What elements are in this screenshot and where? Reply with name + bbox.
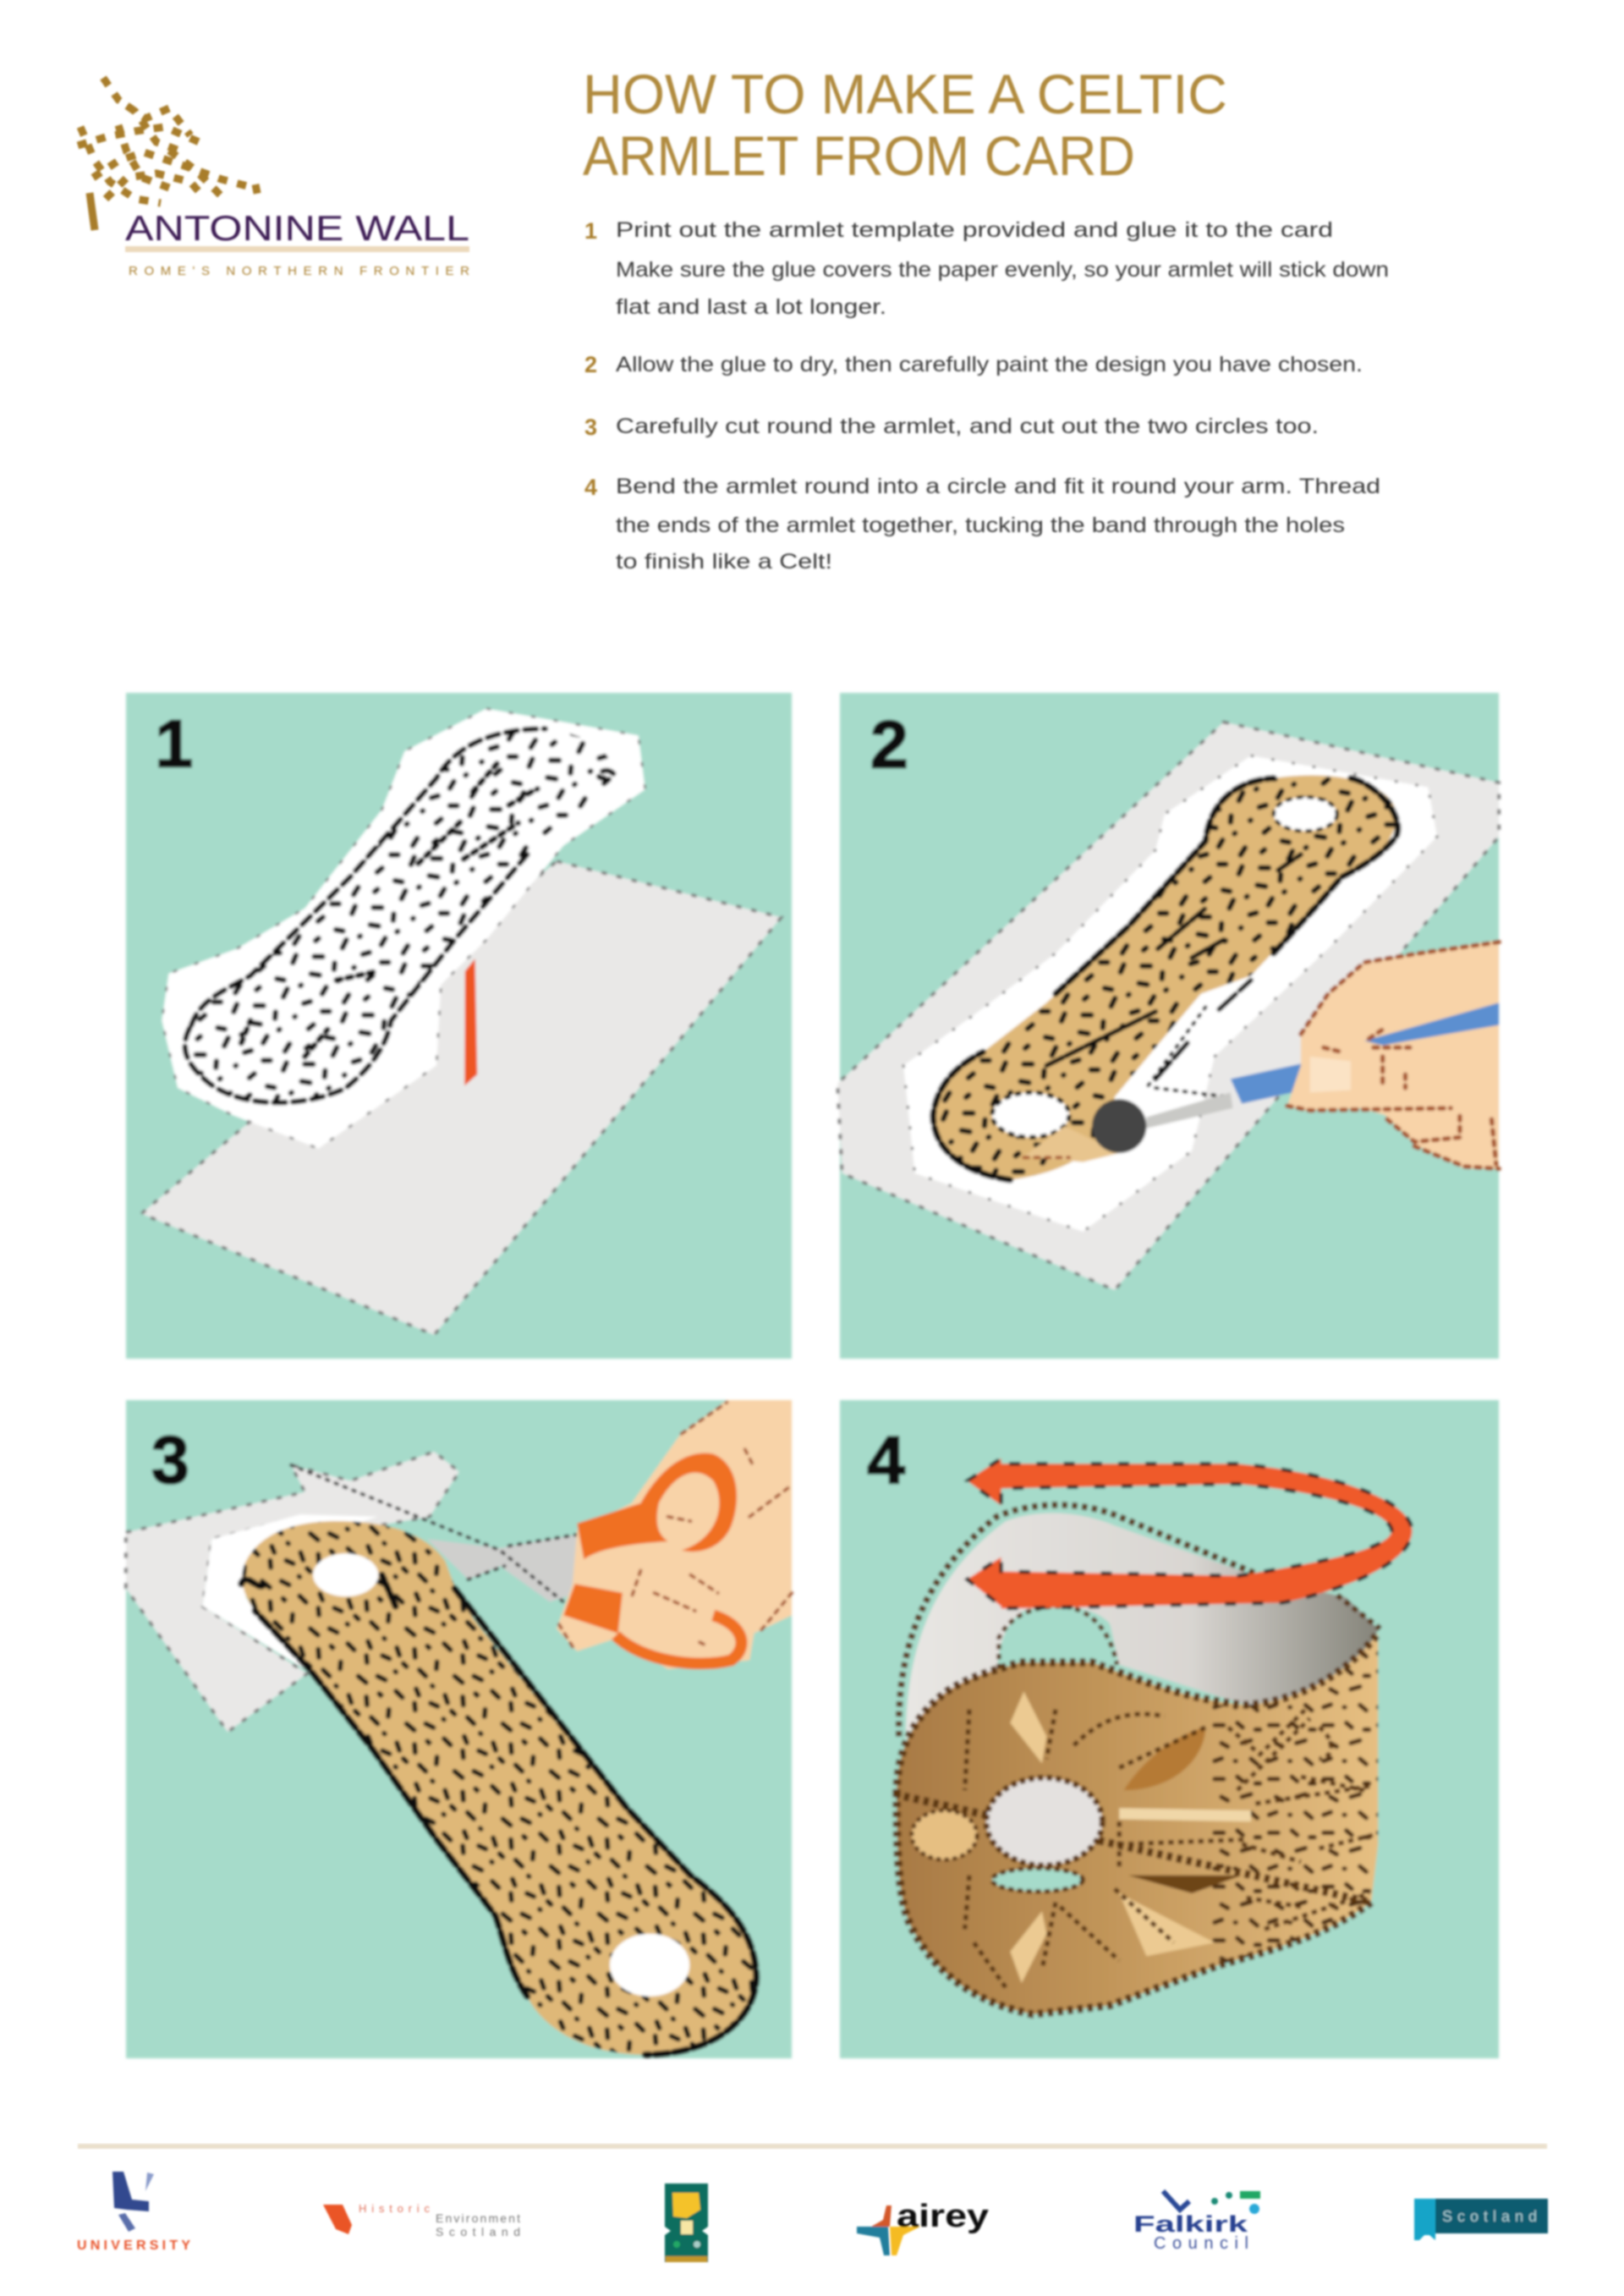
step number 1: 1 [155, 706, 193, 781]
panel: step 4 bend into a loop [840, 1400, 1499, 2058]
logo 6: teal panel [1414, 2199, 1548, 2240]
logo 1: crest: UNIVERSITY [77, 2238, 190, 2253]
title: ARMLET FROM CARD [583, 124, 1135, 187]
hand holding brush [1287, 940, 1499, 1169]
arrow: wrap direction [967, 1458, 1413, 1608]
logo 3: vertical badge [665, 2183, 708, 2262]
cut armlet [241, 1521, 756, 2055]
logo 1: crest [77, 2172, 190, 2253]
card sheet [141, 861, 782, 1335]
inner band of the armlet [899, 1505, 1380, 1741]
step 4 text: Bend the armlet round into a circle and fit it round your arm. Thread [616, 475, 1380, 498]
step 2 text: 2 [584, 352, 597, 377]
logo 6: teal panel: Scotland [1442, 2208, 1537, 2225]
painted armlet [933, 775, 1398, 1180]
panel: step 3 cut out the armlet [126, 1400, 792, 2058]
title: HOW TO MAKE A CELTIC [583, 63, 1227, 125]
step 4 text: to finish like a Celt! [616, 550, 832, 574]
armlet line drawing [185, 728, 613, 1102]
logo 4: star and word [857, 2199, 989, 2255]
footer logos [77, 2172, 1548, 2262]
step number 4: 4 [867, 1423, 906, 1497]
paintbrush [1092, 1063, 1303, 1153]
scissors blades [291, 1465, 577, 1601]
logo: Antonine Wall [78, 78, 469, 278]
hand and scissor handles [557, 1400, 792, 1669]
paper offcut [203, 1514, 377, 1669]
footer rule [78, 2144, 1547, 2149]
card offcut [126, 1452, 459, 1732]
logo 5: blue lettering: Council [1154, 2234, 1248, 2253]
step number 3: 3 [151, 1422, 189, 1497]
step 1 text: Make sure the glue covers the paper evenly, so your armlet will stick down [616, 258, 1389, 282]
glue strip orange [464, 958, 477, 1085]
step 1 text: flat and last a lot longer. [616, 295, 886, 319]
logo 4: star and word: airey [897, 2199, 989, 2234]
step 4 text [584, 475, 1380, 574]
logo 2: orange mark [323, 2202, 520, 2238]
step 1 text: 1 [584, 218, 597, 244]
step 4 text: 4 [584, 475, 597, 500]
logo 2: orange mark: Environment [436, 2211, 520, 2225]
step number 2: 2 [870, 707, 908, 783]
outer band of the armlet [897, 1634, 1378, 2014]
logo 2: orange mark: Scotland [436, 2225, 520, 2238]
logo 5: blue lettering [1133, 2191, 1260, 2253]
title [583, 63, 1227, 187]
logo wordmark: ANTONINE WALL [125, 208, 469, 248]
step 4 text: the ends of the armlet together, tucking the band through the holes [616, 514, 1345, 537]
logo rule [125, 246, 469, 252]
step 3 text: Carefully cut round the armlet, and cut out the two circles too. [616, 415, 1319, 438]
logo tree of gold leaves [78, 78, 259, 230]
logo 2: orange mark: Historic [359, 2202, 430, 2215]
logo tagline: ROME'S NORTHERN FRONTIER [129, 264, 469, 278]
paper template [162, 709, 645, 1149]
panel: step 2 paint the armlet [837, 693, 1499, 1359]
unpainted section [1023, 980, 1251, 1162]
paper template [903, 755, 1437, 1232]
logo 5: blue lettering: Falkirk [1133, 2211, 1249, 2237]
card sheet [837, 722, 1499, 1290]
panel: step 1 lay template on card [126, 693, 792, 1359]
step 1 text [584, 218, 1389, 319]
step 2 text: Allow the glue to dry, then carefully paint the design you have chosen. [616, 353, 1363, 376]
step 1 text: Print out the armlet template provided and glue it to the card [616, 218, 1333, 242]
instructions [584, 218, 1389, 574]
step 3 text: 3 [584, 415, 597, 440]
